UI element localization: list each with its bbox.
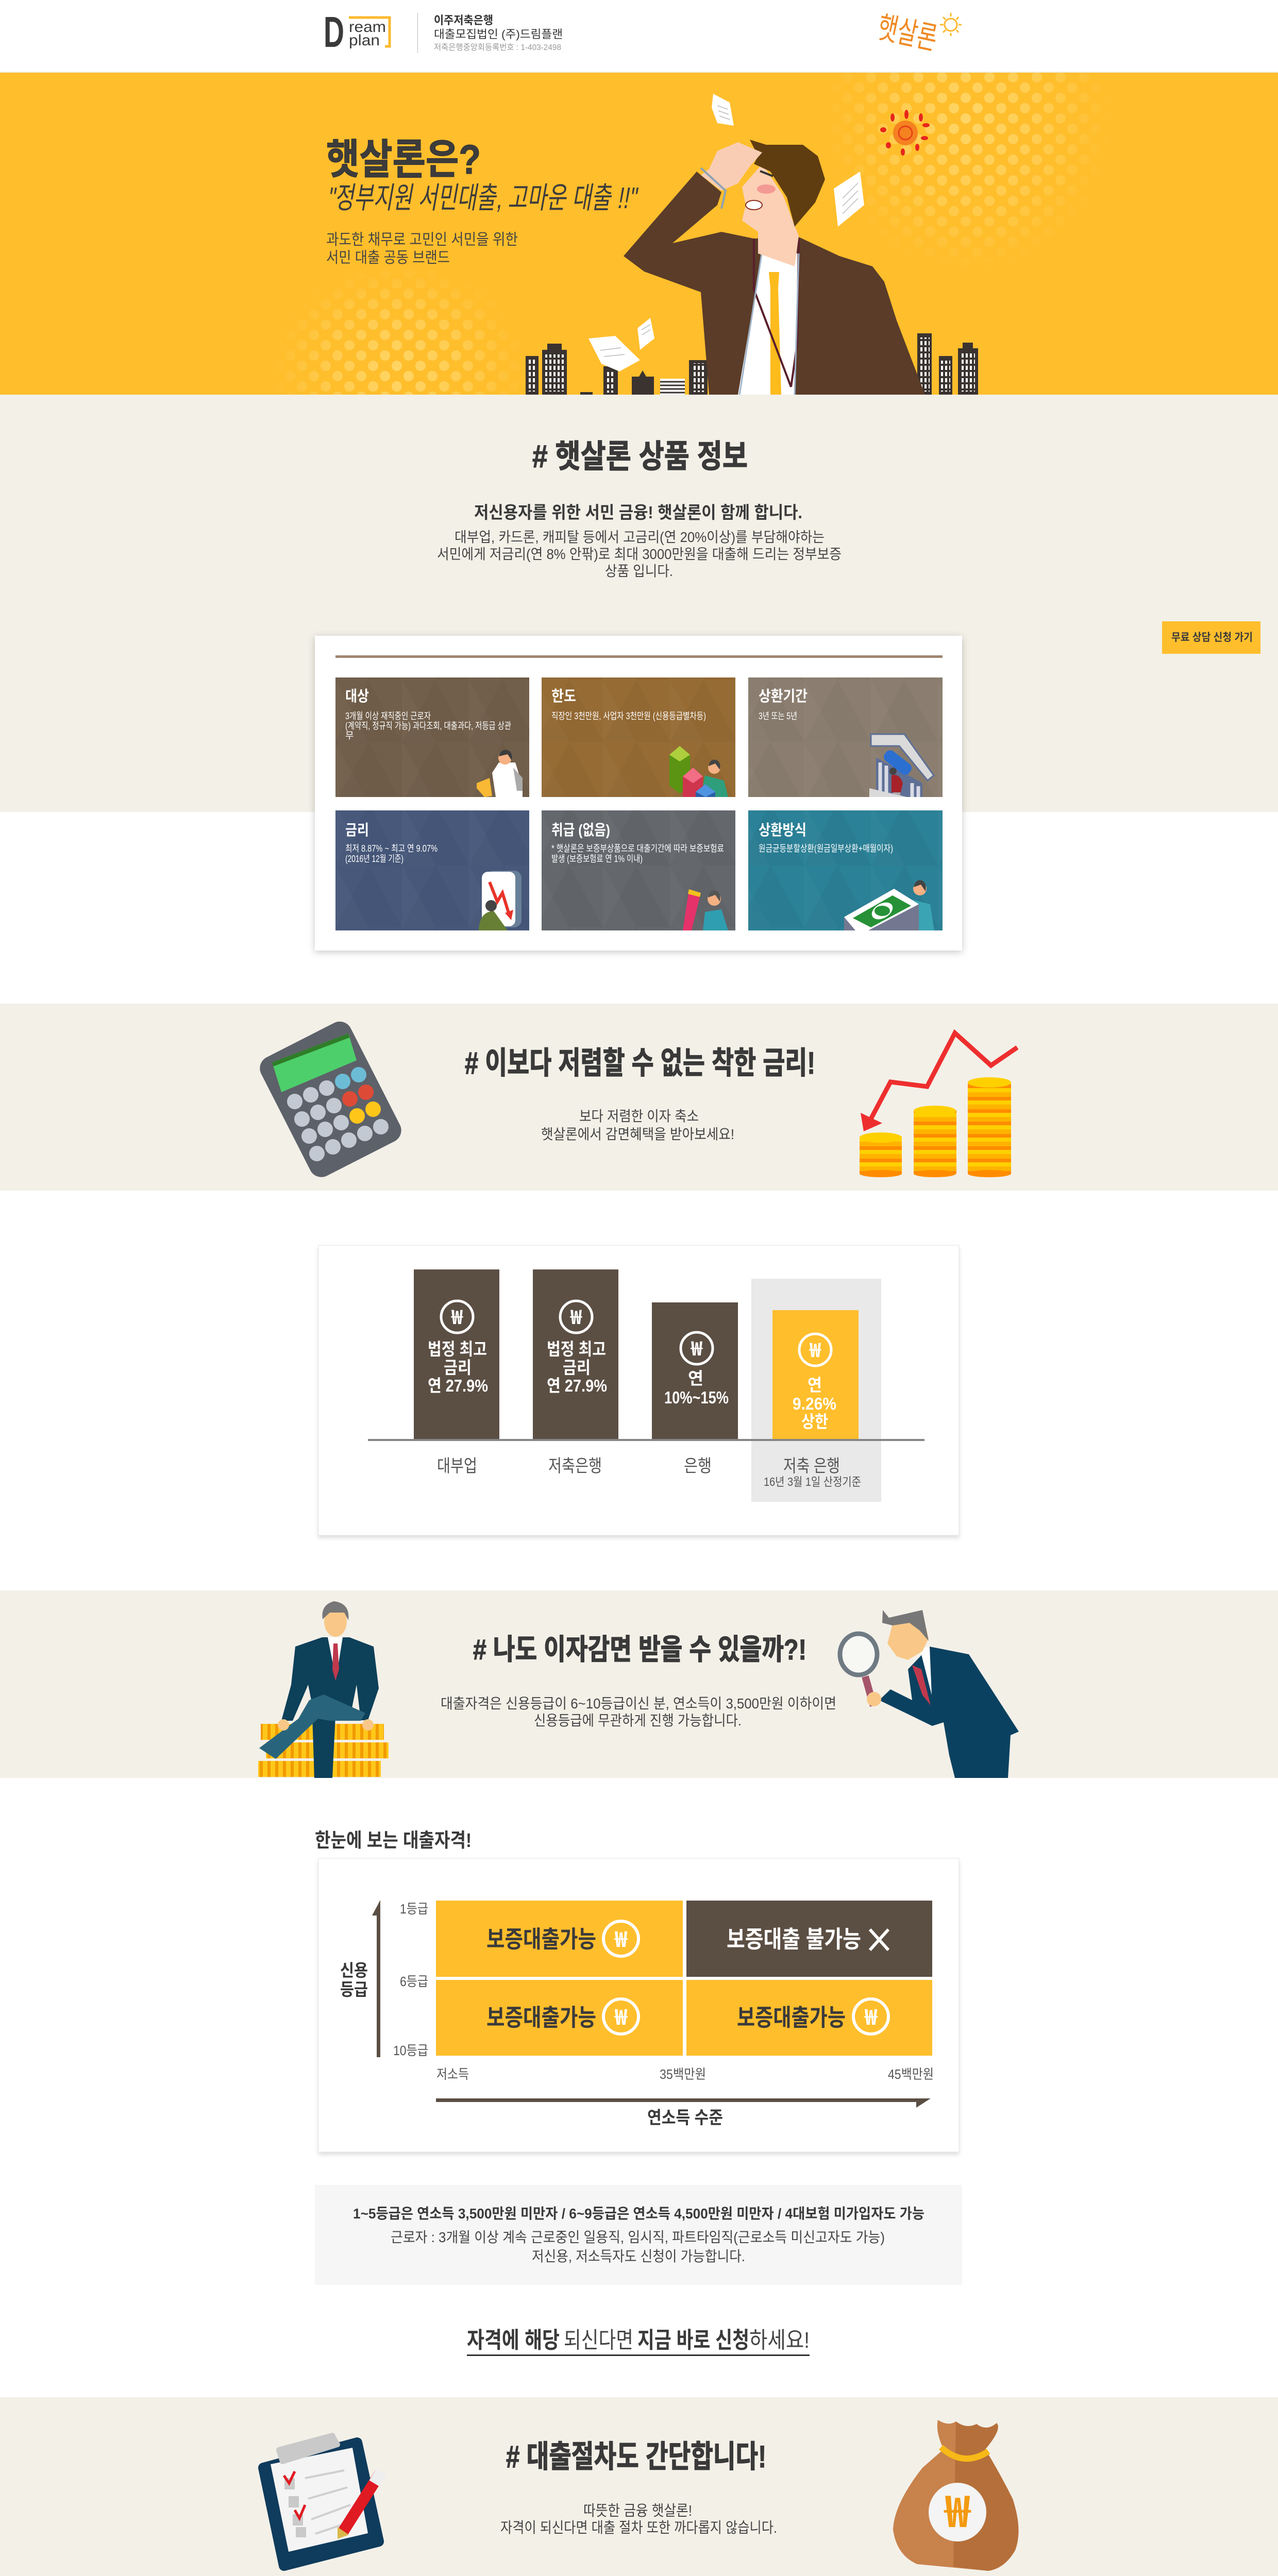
card: 한도: 한도	[551, 688, 576, 705]
matrix cell: low income low credit: ₩	[614, 2000, 628, 2031]
bar: 은행: 연	[688, 1369, 703, 1388]
card: 금리: 최저 8.87% ~ 최고 연 9.07%	[345, 843, 438, 854]
matrix cell: high income low credit: ₩	[864, 2000, 878, 2031]
heading: # 대출절차도 간단합니다!	[506, 2439, 766, 2474]
chart labels: 대부업	[437, 1456, 477, 1476]
bar: 저축은행: 연 27.9%	[547, 1376, 607, 1395]
panel: interest rate chart	[318, 1245, 959, 1535]
axis: credit grade: 신용	[340, 1961, 368, 1980]
bar: 저축 은행 highlighted: ₩	[809, 1334, 822, 1363]
card: 대상: (계약직, 정규직 가능) 과다조회, 대출과다, 저등급 상관	[345, 721, 511, 731]
subtext: 자격이 되신다면 대출 절차 또한 까다롭지 않습니다.	[500, 2519, 777, 2536]
matrix cell: low income low credit: 보증대출가능	[486, 2004, 596, 2031]
floating button	[1162, 621, 1260, 654]
bar: 저축은행: ₩	[570, 1301, 583, 1330]
call to action line: 지금 바로 신청	[637, 2328, 749, 2353]
axis: credit grade	[340, 1900, 428, 2058]
chart labels: 저축은행	[548, 1456, 602, 1476]
card: 취급	[542, 810, 735, 930]
axis: income level: 연소득 수준	[647, 2108, 723, 2128]
floating button: 무료 상담 신청 가기	[1171, 632, 1253, 643]
bar: 저축 은행 highlighted: 9.26%	[793, 1394, 836, 1413]
icon: sun	[880, 110, 930, 156]
subtext: 햇살론에서 감면혜택을 받아보세요!	[541, 1126, 734, 1142]
logo: Dream plan: plan	[349, 32, 380, 49]
bar: 은행: ₩	[691, 1333, 703, 1361]
section banner: low interest	[0, 1004, 1278, 1191]
section banner: eligibility	[0, 1590, 1278, 1778]
logo: 햇살론: 햇살론	[875, 10, 940, 56]
axis: income level: 35백만원	[660, 2066, 706, 2082]
matrix cell: high income low credit	[686, 1980, 932, 2056]
card: 금리	[335, 810, 529, 930]
bar: 대부업	[414, 1269, 499, 1440]
hero description: 과도한 채무로 고민인 서민을 위한	[326, 231, 518, 248]
description: 서민에게 저금리(연 8% 안팎)로 최대 3000만원을 대출해 드리는 정부보증	[437, 546, 842, 562]
call to action line	[467, 2328, 810, 2356]
matrix cell: low income high credit	[436, 1901, 683, 1977]
subtext	[541, 1108, 734, 1142]
matrix cell: low income high credit: ₩	[614, 1922, 628, 1954]
chart labels	[437, 1456, 861, 1488]
icon: flying papers	[588, 94, 864, 371]
company info: 이주저축은행	[434, 14, 493, 27]
hero slogan: "정부지원 서민대출, 고마운 대출 !!"	[326, 181, 641, 215]
illustration: man with magnifier	[840, 1610, 1019, 1778]
panel: eligibility note	[315, 2185, 962, 2285]
axis: credit grade: 6등급	[400, 1974, 428, 1989]
hero description: 서민 대출 공동 브랜드	[326, 249, 450, 266]
panel: product cards	[315, 636, 962, 951]
card: 상환기간: 상환기간	[759, 688, 808, 705]
bar: 저축 은행 highlighted	[772, 1310, 859, 1440]
call to action line: 되신다면	[564, 2328, 633, 2353]
subtext: 따뜻한 금융 햇살론!	[583, 2503, 692, 2519]
bar: 은행	[652, 1302, 738, 1440]
card: 취급: 취급 (없음)	[551, 822, 610, 839]
card: 상환기간	[748, 677, 943, 797]
bar: 은행: 10%~15%	[664, 1388, 729, 1407]
matrix cell: high income low credit: 보증대출가능	[737, 2004, 846, 2031]
card: 금리: (2016년 12월 기준)	[345, 854, 403, 864]
city skyline	[526, 333, 978, 395]
axis: credit grade: 등급	[340, 1980, 368, 1999]
bar: 저축 은행 highlighted: 연	[808, 1376, 822, 1395]
card: 대상	[335, 677, 529, 797]
icon: money bag	[893, 2420, 1018, 2571]
matrix cell: low income low credit	[436, 1980, 683, 2056]
axis: credit grade: 10등급	[393, 2043, 428, 2058]
card: 취급: 발생 (보증보험료 연 1% 이내)	[551, 854, 643, 864]
card: 대상: 무	[345, 731, 354, 741]
icon: calculator	[256, 1018, 406, 1181]
logo: Dream plan: ream	[349, 19, 386, 36]
chart labels: 16년 3월 1일 산정기준	[764, 1475, 861, 1488]
panel: eligibility note: 1~5등급은 연소득 3,500만원 미만자 / 6~9등급은 연소득 4,500만원 미만자 / 4대보험 미가입자도 가능	[353, 2206, 924, 2222]
axis: income level: 45백만원	[888, 2066, 934, 2082]
bar: 저축은행	[533, 1269, 618, 1440]
description	[437, 529, 842, 579]
axis: credit grade: 1등급	[400, 1901, 428, 1917]
matrix cell: not eligible: 보증대출 불가능	[727, 1926, 861, 1953]
card: 상환방식: 상환방식	[759, 822, 806, 839]
company info: 저축은행중앙회등록번호 : 1-403-2498	[434, 43, 561, 52]
matrix cell: low income high credit: 보증대출가능	[486, 1926, 596, 1953]
card: 대상: 3개월 이상 재직중인 근로자	[345, 711, 431, 721]
bar: 대부업: 연 27.9%	[428, 1376, 488, 1395]
icon: coin stacks and arrow	[860, 1033, 1017, 1177]
subtext	[441, 1696, 836, 1728]
subtext: 보다 저렴한 이자 축소	[579, 1108, 699, 1124]
section banner: simple process	[0, 2397, 1278, 2576]
bar: 대부업: 법정 최고	[428, 1340, 487, 1359]
panel: eligibility note: 저신용, 저소득자도 신청이 가능합니다.	[532, 2248, 745, 2264]
card: 상환방식	[748, 810, 943, 930]
illustration: man sitting on coins	[258, 1601, 389, 1778]
description: 상품 입니다.	[605, 563, 673, 579]
axis: income level	[436, 2066, 934, 2128]
card: 한도: 직장인 3천만원, 사업자 3천만원 (신용등급별차등)	[551, 711, 706, 721]
bar: 대부업: ₩	[451, 1301, 464, 1330]
card: 대상: 대상	[345, 688, 369, 705]
logo: Dream plan	[324, 8, 390, 56]
card: 취급: * 햇살론은 보증부상품으로 대출기간에 따라 보증보험료	[551, 843, 724, 854]
chart labels: 은행	[684, 1456, 712, 1476]
call to action line: 자격에 해당	[467, 2328, 560, 2353]
header	[0, 8, 1278, 73]
hero description	[326, 231, 518, 266]
heading: # 나도 이자감면 받을 수 있을까?!	[473, 1633, 806, 1666]
section: product info	[0, 395, 1278, 812]
hero panel	[0, 73, 1278, 395]
panel: eligibility matrix	[318, 1858, 959, 2152]
card: 상환방식: 원금균등분할상환(원금일부상환+매월이자)	[759, 843, 893, 854]
subtext: 대출자격은 신용등급이 6~10등급이신 분, 연소득이 3,500만원 이하이면	[441, 1696, 836, 1711]
heading: # 햇살론 상품 정보	[532, 439, 748, 474]
bar: 저축 은행 highlighted: 상한	[801, 1412, 828, 1431]
illustration: businessman looking up	[624, 140, 925, 395]
chart labels: 저축 은행	[783, 1456, 840, 1476]
description: 대부업, 카드론, 캐피탈 등에서 고금리(연 20%이상)를 부담해야하는	[455, 529, 825, 545]
card: 상환기간: 3년 또는 5년	[759, 711, 797, 721]
bar: 저축은행: 법정 최고	[547, 1340, 606, 1359]
hero title: 햇살론은?	[326, 137, 481, 182]
matrix cell: not eligible	[686, 1901, 932, 1977]
subheading: 저신용자를 위한 서민 금융! 햇살론이 함께 합니다.	[474, 503, 802, 522]
logo: Dream plan: D	[324, 8, 344, 56]
company info	[434, 14, 563, 52]
icon: clipboard	[263, 2435, 381, 2566]
call to action line: 하세요!	[749, 2328, 810, 2353]
icon: money bag: ₩	[944, 2478, 971, 2540]
heading: eligibility at a glance: 한눈에 보는 대출자격!	[315, 1830, 472, 1852]
subtext: 신용등급에 무관하게 진행 가능합니다.	[534, 1713, 742, 1728]
bar: 대부업: 금리	[444, 1358, 472, 1377]
subtext	[500, 2503, 777, 2536]
bar: 저축은행: 금리	[563, 1358, 591, 1377]
card: 금리: 금리	[345, 822, 369, 839]
heading: # 이보다 저렴할 수 없는 착한 금리!	[465, 1046, 815, 1080]
card: 한도	[542, 677, 735, 797]
panel: eligibility note: 근로자 : 3개월 이상 계속 근로중인 일용직, 임시직, 파트타임직(근로소득 미신고자도 가능)	[391, 2229, 885, 2245]
axis: income level: 저소득	[436, 2066, 469, 2082]
company info: 대출모집법인 (주)드림플랜	[434, 28, 563, 41]
